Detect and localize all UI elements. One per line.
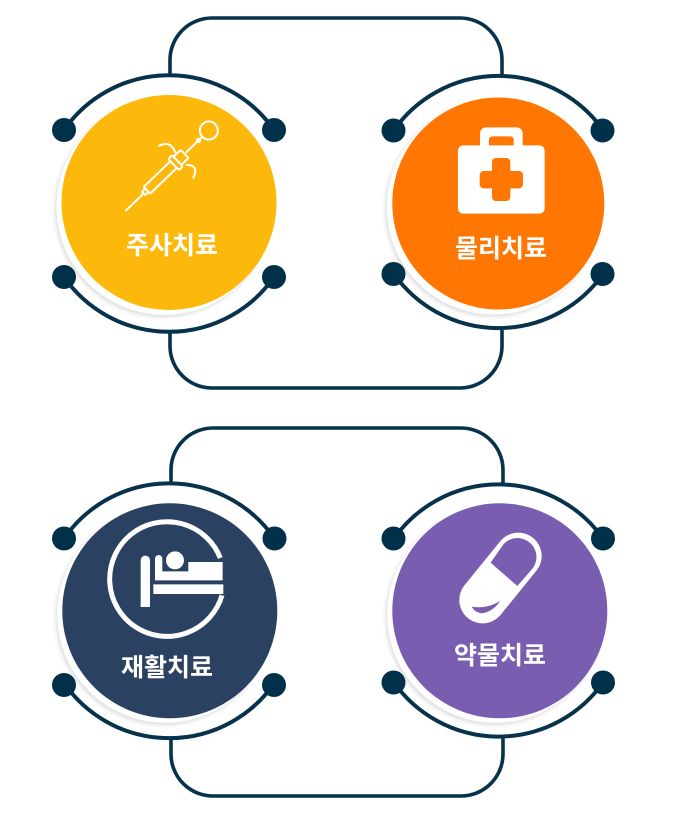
connector dots [382, 118, 614, 286]
disc shadow [56, 509, 272, 725]
panel: physical therapy [382, 76, 614, 328]
white halo [57, 507, 273, 723]
disc shadow [386, 509, 602, 725]
panel: medication therapy [382, 484, 615, 737]
connector: bottom group lower bracket [171, 738, 503, 796]
connector dots [382, 526, 615, 694]
ring arcs [64, 483, 274, 738]
panel: injection therapy [52, 75, 286, 332]
ring arcs [394, 484, 603, 737]
icon: hospital bed [110, 522, 223, 636]
connector: top group lower bracket [170, 330, 502, 388]
ring arcs [394, 76, 603, 328]
icon: syringe [120, 118, 222, 217]
connector: bottom group upper bracket [171, 428, 503, 484]
white halo [387, 100, 601, 314]
connector dots [52, 118, 286, 289]
disc shadow [385, 102, 599, 316]
white halo [56, 99, 272, 315]
connector dots [52, 526, 286, 697]
ring arcs [64, 75, 274, 332]
connector: top group upper bracket [170, 18, 502, 76]
icon: first aid kit [458, 127, 545, 214]
orange disc [392, 98, 604, 310]
navy disc [62, 503, 277, 718]
purple disc [392, 503, 607, 718]
label: physical therapy: 물리치료 [455, 235, 547, 263]
label: medication therapy: 약물치료 [454, 642, 546, 670]
panel: rehabilitation therapy [52, 483, 286, 738]
icon: capsule [472, 538, 536, 613]
disc shadow [55, 101, 271, 317]
label: rehabilitation therapy: 재활치료 [121, 654, 213, 682]
yellow disc [62, 95, 276, 310]
white halo [387, 507, 603, 723]
label: injection therapy: 주사치료 [126, 232, 218, 260]
